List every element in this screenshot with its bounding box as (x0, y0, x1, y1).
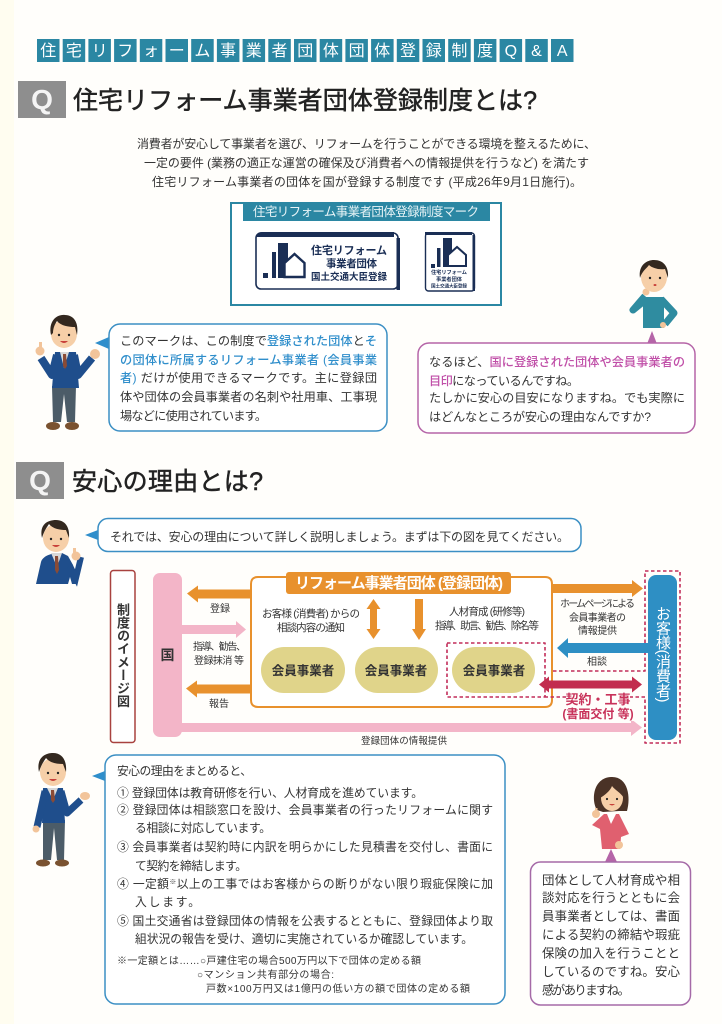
footnote: 戸数×100万円又は1億円の低い方の額で団体の定める額 (206, 982, 470, 995)
speech bubble: summary of reasons: 入します。 (135, 895, 200, 909)
icon: small registration mark: 住宅リフォーム (431, 268, 467, 276)
panel: registration mark (231, 202, 501, 305)
heading: Q1 (18, 81, 537, 118)
arrow: website info: 会員事業者の (569, 611, 626, 624)
arrow: guidance: 指導、勧告、 (193, 640, 246, 653)
icon: large registration mark (256, 232, 400, 290)
top banner: title chips (37, 39, 574, 62)
double arrow (366, 599, 380, 639)
heading: Q1: 住宅リフォーム事業者団体登録制度とは? (73, 87, 537, 115)
heading: Q1: Q (31, 84, 53, 115)
footnote: ○マンション共有部分の場合: (197, 968, 334, 981)
top banner: title chips: リ (92, 43, 108, 60)
speech bubble: about the mark: このマークは、この制度で登録された団体とそ (120, 333, 377, 348)
speech bubble: question about relief: たしかに安心の目安になりますね。でも実際に (429, 390, 685, 405)
speech bubble: woman's comment: 談対応を行うとともに会 (542, 891, 681, 905)
government bar (153, 573, 182, 737)
member 2: 会員事業者 (365, 663, 427, 678)
arrow: website info: ホームページによる (560, 598, 635, 610)
member 3: 会員事業者 (463, 663, 525, 678)
speech bubble: about the mark: 場などに使用されています。 (120, 408, 267, 423)
arrow: report: 報告 (209, 697, 229, 710)
member 2 (355, 647, 438, 693)
intro paragraph: 一定の要件 (業務の適正な運営の確保及び消費者への情報提供を行うなど) を満たす (144, 155, 589, 170)
speech bubble: about the mark: 者) だけが使用できるマークです。主に登録団 (120, 370, 377, 385)
top banner: title chips: 業 (246, 42, 262, 60)
panel: reform business group (251, 572, 552, 707)
icon: small registration mark: 国土交通大臣登録 (431, 282, 467, 290)
arrow: website info (552, 580, 643, 637)
speech bubble: woman's comment: しているのですね。安心 (542, 965, 681, 979)
consultation notice text (262, 607, 360, 634)
speech bubble: about the mark: の団体に所属するリフォーム事業者 (会員事業 (120, 352, 377, 367)
top banner: title chips: 体 (323, 42, 339, 60)
top banner: title chips: 登 (400, 42, 416, 60)
mark panel heading: 住宅リフォーム事業者団体登録制度マーク (253, 204, 479, 219)
footnote (117, 954, 470, 995)
arrow: consultation: 相談 (587, 655, 607, 668)
speech bubble: summary of reasons: 以上の工事ではお客様からの断りがない限り瑕疵保険に加 (177, 877, 493, 891)
top banner: title chips: 度 (477, 42, 493, 60)
heading: Q2 (16, 462, 263, 499)
figure: man bust pointing (36, 520, 81, 584)
intro paragraph: 消費者が安心して事業者を選び、リフォームを行うことができる環境を整えるために、 (137, 136, 596, 151)
icon: small registration mark (425, 232, 475, 291)
member 1: 会員事業者 (272, 663, 334, 678)
speech bubble: woman's comment: 団体として人材育成や相 (542, 872, 680, 888)
training text: 人材育成 (研修等) (449, 605, 525, 618)
icon: large registration mark: 住宅リフォーム (311, 243, 387, 257)
speech bubble: summary of reasons: ② 登録団体は相談窓口を設け、会員事業者の行ったリフォームに関す (117, 803, 493, 817)
diagram label: 制度のイメージ図 (115, 603, 130, 709)
arrow: consultation (557, 638, 648, 668)
white gap behind the contract label (553, 695, 643, 721)
speech bubble: question about relief (418, 331, 695, 433)
arrow: registration: 登録 (210, 602, 230, 615)
heading: Q2: Q (29, 465, 51, 496)
speech bubble: woman's comment: による契約の締結や瑕疵 (542, 927, 680, 942)
speech bubble: summary of reasons: ① 登録団体は教育研修を行い、人材育成を進めています。 (117, 786, 423, 800)
government bar: 国 (160, 647, 174, 663)
training text: 指導、助言、勧告、除名 等 (435, 619, 540, 632)
member 1 (261, 647, 345, 693)
top banner: title chips: ォ (143, 43, 159, 60)
diagram: system image (110, 570, 680, 747)
speech bubble: summary of reasons: て契約を締結します。 (135, 859, 247, 873)
intro paragraph: 住宅リフォーム事業者の団体を国が登録する制度です (平成26年9月1日施行)。 (152, 174, 582, 189)
top banner: title chips: 住 (40, 42, 56, 60)
mark panel heading (243, 202, 490, 221)
speech bubble: woman's comment: 感がありますね。 (542, 982, 630, 998)
dashed contract boundary (447, 571, 680, 743)
figure: man in teal sweater, thinking (633, 260, 674, 328)
speech bubble: summary of reasons: ④ 一定額 (117, 877, 169, 891)
speech bubble: question about relief: 目印になっているんですね。 (429, 373, 579, 388)
top banner: title chips: フ (117, 43, 133, 60)
arrow: guidance (182, 621, 246, 667)
top banner: title chips: 団 (297, 43, 313, 60)
diagram label (110, 570, 135, 742)
figure: woman in pink jacket (592, 777, 629, 849)
arrow: registration (187, 586, 251, 615)
speech bubble: summary of reasons: る相談に対応しています。 (135, 821, 271, 835)
arrow: report (186, 680, 251, 710)
top banner: title chips: A (557, 43, 568, 60)
speech bubble: woman's comment: 員事業者としては、書面 (542, 908, 680, 924)
arrow: contract: (書面交付 等) (562, 706, 634, 721)
long pink arrow: registered group info (180, 719, 642, 747)
speech bubble: summary of reasons: ⑤ 国土交通省は登録団体の情報を公表するとともに、登録団体より取 (117, 914, 493, 928)
training text (435, 605, 540, 632)
speech bubble: question about relief: はどんなところが安心の理由なんですか? (429, 409, 651, 424)
footnote: ※一定額とは……○戸建住宅の場合500万円以下で団体の定める額 (117, 954, 421, 967)
consultation notice text: お客様 (消費者) からの (262, 607, 360, 620)
speech bubble: summary of reasons: ※ (169, 878, 176, 886)
figure: man in suit, presenting (32, 753, 90, 866)
down arrow (412, 599, 426, 640)
consultation notice text: 相談内容の通知 (277, 621, 345, 634)
figure: man in suit, gesturing (36, 315, 100, 430)
member 3 (452, 647, 535, 693)
icon: large registration mark: 国土交通大臣登録 (311, 271, 387, 283)
intro paragraph (137, 136, 596, 189)
long pink arrow: registered group info: 登録団体の情報提供 (361, 735, 447, 747)
group title tag: リフォーム事業者団体 (登録団体) (295, 574, 503, 592)
top banner: title chips: Q (505, 43, 517, 60)
customer bar: お客様(消費者) (654, 606, 671, 702)
arrow: contract (539, 676, 642, 721)
icon: small registration mark: 事業者団体 (436, 275, 463, 283)
customer bar (648, 575, 677, 740)
top banner: title chips: 事 (220, 42, 236, 60)
top banner: title chips: 団 (349, 43, 365, 60)
top banner: title chips: & (531, 43, 542, 60)
speech bubble: summary of reasons: ③ 会員事業者は契約時に内訳を明らかにした見積書を交付し、書面に (117, 840, 493, 854)
top banner: title chips: 宅 (66, 42, 82, 60)
top banner: title chips: 制 (451, 42, 467, 60)
speech bubble: woman's comment (530, 849, 690, 1005)
top banner: title chips: 録 (426, 42, 442, 60)
top banner: title chips: 体 (374, 42, 390, 60)
heading: Q2: 安心の理由とは? (72, 468, 263, 496)
speech bubble: woman's comment: 保険の加入を行うことと (542, 946, 680, 960)
speech bubble: about the mark (95, 324, 387, 431)
speech bubble: explain (85, 518, 581, 552)
speech bubble: summary of reasons (92, 755, 505, 1004)
top banner: title chips: ム (194, 43, 210, 60)
speech bubble: explain: それでは、安心の理由について詳しく説明しましょう。まずは下の図を見てください。 (110, 529, 569, 544)
arrow: contract: 契約・工事 (565, 692, 631, 707)
arrow: guidance: 登録抹消 等 (194, 654, 244, 667)
speech bubble: about the mark: 体や団体の会員事業者の名刺や社用車、工事現 (120, 389, 377, 404)
top banner: title chips: ー (169, 43, 185, 60)
icon: large registration mark: 事業者団体 (326, 257, 378, 270)
speech bubble: question about relief: なるほど、国に登録された団体や会員事業者の (429, 354, 685, 369)
speech bubble: summary of reasons: 組状況の報告を受け、適切に実施されているか確認しています。 (135, 932, 473, 946)
top banner: title chips: 者 (271, 42, 288, 60)
arrow: website info: 情報提供 (578, 624, 617, 637)
speech bubble: summary of reasons: 安心の理由をまとめると、 (117, 764, 252, 778)
